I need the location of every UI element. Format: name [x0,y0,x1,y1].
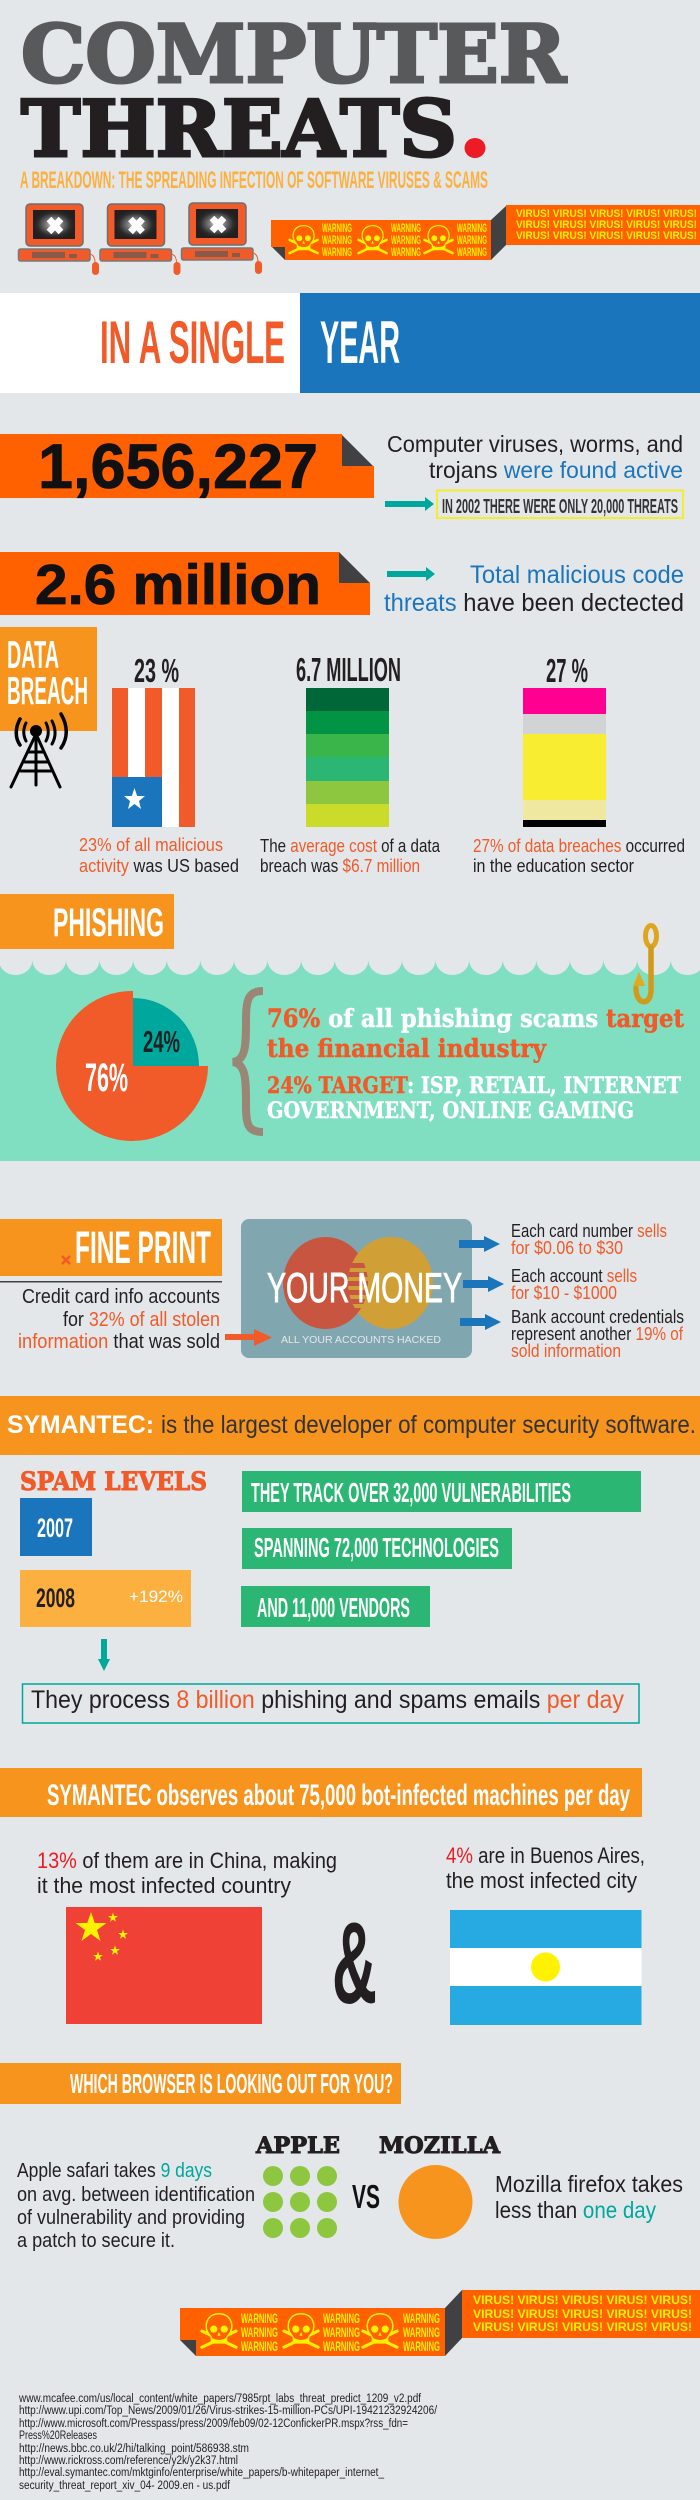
chart: phishing pie: 24% [143,1024,180,1059]
chart: phishing pie: 76% [85,1056,128,1100]
warning ribbon: top: WARNING [322,221,352,235]
warning ribbon: top: WARNING [457,233,487,247]
text: card prices: represent another 19% of [511,1324,684,1344]
illustration: hacked credit card: YOUR MONEY [267,1264,462,1311]
arrow: to malicious code text [387,567,435,581]
text: viruses found active: Computer viruses, worms, and [387,431,683,457]
text: firefox patch time [495,2171,683,2223]
text: card prices: for $10 - $1000 [511,1283,617,1303]
text: safari patch time: a patch to secure it. [17,2230,175,2252]
bar: spam 2008: 2008 [36,1583,75,1613]
text: malicious code threats [384,561,684,617]
caption: 23 percent: activity was US based [79,856,239,876]
text: credit card info: for 32% of all stolen [63,1309,220,1331]
warning ribbon: bottom: WARNING [403,2324,440,2340]
illustration: hacked credit card: ALL YOUR ACCOUNTS HACKED [281,1335,441,1346]
title: THREATS [21,84,457,175]
chart: phishing pie [56,991,208,1141]
text: card prices: Each account sells [511,1266,637,1286]
warning ribbon: bottom: WARNING [241,2324,278,2340]
heading: data breach: DATA [7,634,59,677]
callouts: symantec facts: AND 11,000 VENDORS [257,1592,410,1623]
text: safari patch time: on avg. between identification [17,2184,255,2206]
bar: spam 2007 [20,1498,92,1556]
caption: average cost [260,836,441,876]
text: card prices: for $0.06 to $30 [511,1238,623,1258]
text: credit card info: information that was sold [18,1331,220,1353]
text: buenos aires: the most infected city [446,1868,637,1893]
text: phishing targets: GOVERNMENT, ONLINE GAMING [267,1098,634,1124]
text: malicious code threats: Total malicious code [470,561,684,589]
warning ribbon: bottom: WARNING [323,2338,360,2354]
warning ribbon: bottom: VIRUS! VIRUS! VIRUS! VIRUS! VIRUS! [473,2320,692,2334]
text: phishing targets: the financial industry [267,1034,547,1063]
warning ribbon: top: WARNING [457,245,487,259]
arrow: to 2002 note [385,497,434,511]
band: symantec: SYMANTEC: [7,1411,154,1439]
arrow: spam to emails [98,1639,110,1671]
icon: three infected computers [18,203,262,275]
arrow: to card [225,1329,272,1346]
warning ribbon: bottom [180,2290,700,2356]
panel: phishing water [0,959,700,1161]
title: COMPUTER [21,7,567,101]
warning ribbon: bottom: WARNING [241,2338,278,2354]
callout: 8 billion emails [22,1684,639,1723]
text: sources: http://www.rickross.com/reference/y2k/y2k37.html [19,2455,238,2467]
text: card prices: sold information [511,1341,621,1361]
heading: phishing: PHISHING [53,901,164,945]
bar: spam 2007: 2007 [37,1513,73,1543]
text: sources: security_threat_report_xiv_04- 2009.en - us.pdf [19,2480,231,2492]
text: viruses found active [387,431,683,483]
heading: which browser: WHICH BROWSER IS LOOKING OUT FOR YOU? [70,2068,393,2099]
band: symantec [0,1396,700,1455]
chart: nine apple day dots [263,2166,337,2238]
divider line [0,1281,222,1282]
label: mozilla: MOZILLA [379,2133,501,2159]
caption: education sector: 27% of data breaches occurred [473,836,685,856]
warning ribbon: bottom: VIRUS! VIRUS! VIRUS! VIRUS! VIRUS! [473,2293,692,2307]
text: card prices [511,1221,684,1361]
chart: 27 percent pencil bar [523,652,606,827]
text: sources: www.mcafee.com/us/local_content/white_papers/7985rpt_labs_threat_predict_1209_v2.pdf [18,2393,422,2405]
warning ribbon: bottom: WARNING [323,2324,360,2340]
chart: 23 percent flag bar: 23 % [134,652,179,689]
text: sources: http://www.upi.com/Top_News/2009/01/26/Virus-strikes-15-million-PCs/UPI-19421232924206/ [19,2405,438,2417]
text: buenos aires [446,1843,645,1893]
chart: 27 percent pencil bar: 27 % [546,652,588,689]
heading: data breach [0,627,97,731]
warning ribbon: bottom: VIRUS! VIRUS! VIRUS! VIRUS! VIRUS! [473,2307,692,2321]
heading: fine print [0,1219,222,1276]
heading: which browser [0,2063,401,2104]
heading: phishing [0,894,174,949]
warning ribbon: bottom: WARNING [403,2338,440,2354]
text: credit card info [18,1286,220,1353]
text: phishing targets [267,1004,684,1124]
text: safari patch time [17,2160,255,2252]
caption: 23 percent [79,835,239,876]
warning ribbon: top: WARNING [322,233,352,247]
text: phishing targets: 76% of all phishing scams target [267,1004,684,1033]
arrows: card outcomes [459,1236,504,1330]
flag: china [66,1907,262,2024]
chart: one mozilla day dot [398,2165,472,2239]
illustration: hacked credit card [241,1219,472,1358]
text: safari patch time: Apple safari takes 9 days [17,2160,212,2182]
stat ribbon: 1,656,227: 1,656,227 [38,432,318,502]
callout: 8 billion emails: They process 8 billion phishing and spams emails per day [31,1686,624,1714]
warning ribbon: top: WARNING [322,245,352,259]
callouts: symantec facts [241,1471,641,1627]
text: safari patch time: of vulnerability and providing [17,2207,245,2229]
bar: spam 2008: +192% [129,1587,183,1606]
text: credit card info: Credit card info accounts [22,1286,220,1308]
flag: argentina [450,1910,642,2025]
band: in a single year: YEAR [320,309,400,376]
text: firefox patch time: Mozilla firefox takes [495,2171,683,2197]
chart: 6.7 million green bar [296,651,401,827]
text: sources: http://www.microsoft.com/Presspass/press/2009/feb09/02-12ConfickerPR.mspx?rss_fdn= [19,2418,408,2430]
caption: 23 percent: 23% of all malicious [79,835,223,855]
text: china [37,1848,337,1898]
warning ribbon: top: WARNING [391,245,421,259]
warning ribbon: bottom: WARNING [241,2310,278,2326]
warning ribbon: top: WARNING [457,221,487,235]
text: sources [18,2393,438,2492]
text: firefox patch time: less than one day [495,2197,656,2223]
label: apple: APPLE [255,2133,340,2159]
band: in a single year: IN A SINGLE [100,309,285,376]
chart: 23 percent flag bar [112,652,195,827]
text: sources: http://news.bbc.co.uk/2/hi/talking_point/586938.stm [19,2443,249,2455]
text: buenos aires: 4% are in Buenos Aires, [446,1843,645,1868]
warning ribbon: top: WARNING [391,221,421,235]
text: malicious code threats: threats have been dectected [384,589,684,617]
heading: spam levels: SPAM LEVELS [20,1467,207,1496]
band: bot-infected machines [0,1768,642,1817]
band: in a single year [0,293,700,393]
heading: fine print: FINE PRINT [75,1222,211,1273]
stat ribbon: 2.6 million: 2.6 million [35,553,321,617]
ampersand: & [332,1898,377,2028]
icon: curly brace [233,991,263,1132]
icon: broadcast tower [11,714,66,787]
text: sources: http://eval.symantec.com/mktginfo/enterprise/white_papers/b-whitepaper_internet_ [19,2467,385,2479]
warning ribbon: top: WARNING [391,233,421,247]
text: china: 13% of them are in China, making [37,1848,337,1873]
icon: fish hook [633,926,656,1002]
text: viruses found active: trojans were found active [429,457,683,483]
title [21,7,567,175]
caption: average cost: The average cost of a data [260,836,441,856]
caption: average cost: breach was $6.7 million [260,856,420,876]
warning ribbon: bottom: WARNING [323,2310,360,2326]
text: card prices: Each card number sells [511,1221,667,1241]
caption: education sector: in the education sector [473,856,634,876]
versus label: VS [352,2178,380,2215]
caption: education sector [473,836,685,876]
warning ribbon: bottom: WARNING [403,2310,440,2326]
bar: spam 2008 [20,1570,191,1627]
chart: 6.7 million green bar: 6.7 MILLION [296,651,401,688]
warning ribbon: top [271,205,700,260]
text: china: it the most infected country [37,1873,291,1898]
heading: data breach: BREACH [7,670,88,713]
text: sources: Press%20Releases [19,2430,97,2442]
